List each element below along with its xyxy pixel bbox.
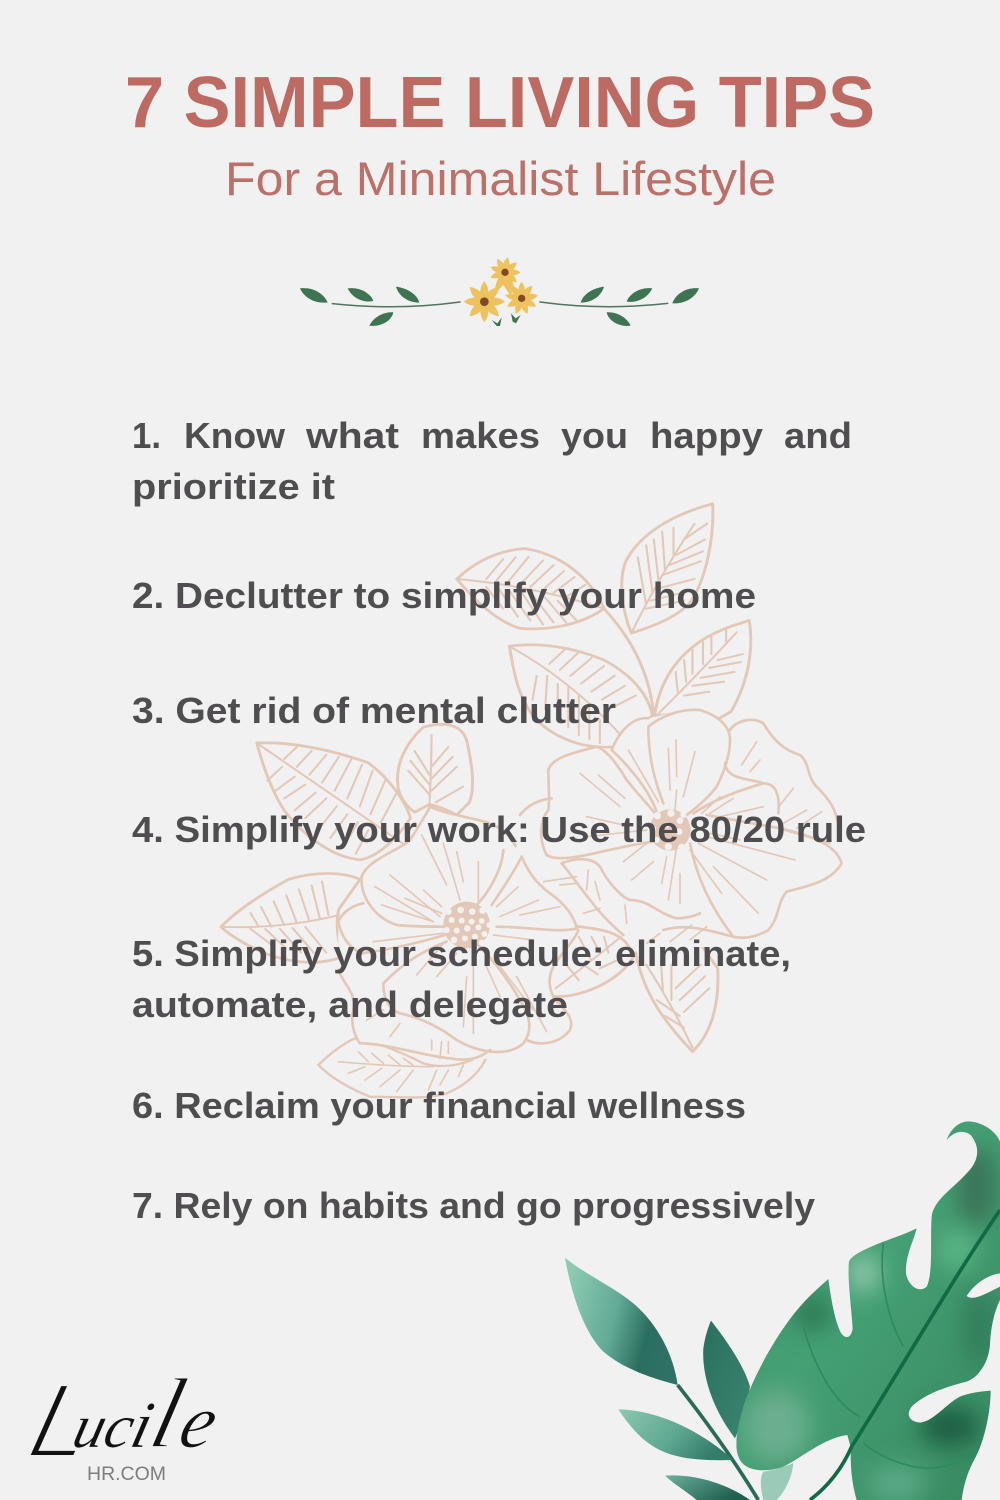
tip 1: and: [784, 415, 852, 456]
subtitle: For a Minimalist Lifestyle: [225, 152, 776, 205]
tip 4: 4. Simplify your work: Use the 80/20 rule: [132, 809, 866, 850]
watercolour green leaves: [565, 1117, 1000, 1500]
tip 1: [132, 415, 852, 507]
bottom leaf: [318, 1038, 488, 1097]
left leaf two: [398, 724, 473, 815]
mid right leaf: [655, 620, 751, 725]
logo domain: HR.COM: [87, 1464, 166, 1485]
tip 7: 7. Rely on habits and go progressively: [132, 1185, 816, 1226]
lower middle leaf: [549, 925, 634, 997]
left leaf three: [221, 874, 360, 962]
tip 1: prioritize it: [132, 466, 335, 507]
leaf: upper left: [565, 1258, 678, 1385]
left flower: [338, 807, 578, 1060]
tip 1: makes: [421, 415, 540, 456]
right flower: [520, 710, 842, 948]
logo script wordmark: l: [141, 1358, 196, 1469]
logo script wordmark: u: [67, 1392, 115, 1461]
logo script wordmark: L: [19, 1361, 107, 1480]
leaf: bottom left: [665, 1475, 750, 1500]
top left leaf: [457, 549, 604, 629]
tip 1: happy: [650, 415, 764, 456]
lower right leaf: [636, 945, 718, 1051]
floral line art background: [221, 504, 842, 1097]
tip 1: 1.: [132, 415, 161, 456]
stem: [678, 1385, 758, 1500]
tips list: [132, 415, 866, 1226]
stem: [604, 609, 654, 713]
tip 5: 5. Simplify your schedule: eliminate,: [132, 933, 791, 974]
tip 5: [132, 933, 791, 1025]
tip 3: 3. Get rid of mental clutter: [132, 690, 616, 731]
leaf: small pale bud: [761, 1463, 793, 1500]
leaf: centre dark: [703, 1321, 750, 1438]
left leaf one: [257, 743, 410, 860]
logo script wordmark: e: [172, 1379, 227, 1464]
ornament: leafy branch with yellow flowers: [300, 257, 699, 326]
big monstera leaf: [730, 1117, 1000, 1500]
tip 1: you: [561, 415, 628, 456]
logo: [19, 1358, 232, 1485]
title: 7 SIMPLE LIVING TIPS: [125, 63, 875, 143]
tip 5: automate, and delegate: [132, 984, 568, 1025]
tip 6: 6. Reclaim your financial wellness: [132, 1085, 746, 1126]
logo script wordmark: c: [98, 1392, 142, 1461]
midrib: [810, 1210, 1000, 1500]
tip 2: 2. Declutter to simplify your home: [132, 575, 756, 616]
leaf: lower left: [618, 1409, 733, 1460]
mid left leaf: [509, 645, 652, 747]
top right leaf: [622, 504, 713, 633]
tip 1: what: [305, 415, 399, 456]
tip 1: Know: [184, 415, 286, 456]
logo script wordmark: i: [124, 1389, 161, 1462]
foliage: [221, 504, 751, 1051]
